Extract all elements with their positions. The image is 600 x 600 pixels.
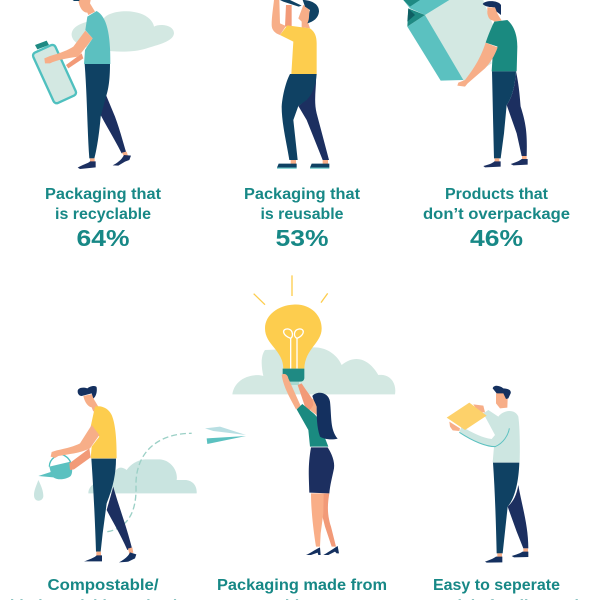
panel: products that don't overpackage: don’t overpackage [423,206,570,223]
label: easy to separate: Easy to seperate [433,577,560,594]
illustration: man reading yellow package [447,386,528,563]
panel: compostable / biodegradable packaging [10,386,246,600]
label: reusable: Packaging that [244,186,360,203]
label: overpackage: Products that [445,186,548,203]
value: 64%: 64% [76,225,130,251]
illustration: man watering with cloud and paper plane [34,386,246,562]
label: renewable sources: Packaging made from [217,577,387,594]
panel: easy to separate materials for disposal [414,386,579,600]
value: 46%: 46% [470,225,523,251]
illustration: man drinking from bottle [272,0,329,169]
value: 53%: 53% [276,225,329,251]
panel: products that don't overpackage [403,0,570,251]
panel: packaging that is recyclable [32,0,174,251]
label: recyclable: Packaging that [45,186,161,203]
panel: packaging made from renewable sources [217,275,395,600]
illustration: woman lifting light bulb [232,275,395,555]
illustration: man holding battery [32,0,174,169]
panel: packaging that is reusable: is reusable [260,206,344,223]
illustration: man carrying oversized package [403,0,528,167]
panel: packaging that is recyclable: is recyclable [55,206,151,223]
panel: packaging that is reusable [244,0,360,251]
label: compostable: Compostable/ [48,577,159,594]
